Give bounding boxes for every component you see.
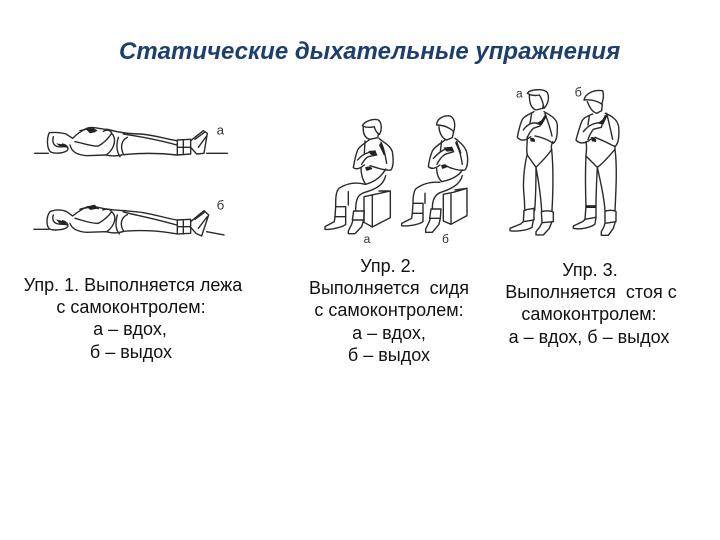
figure: exercise 2b sitting, exhale: б — [442, 232, 449, 246]
figure: exercise 1a lying, inhale — [35, 122, 227, 157]
figure: exercise 3a standing, inhale — [510, 86, 557, 235]
caption: exercise 1: с самоконтролем: — [56, 297, 206, 317]
caption: exercise 3: самоконтролем: — [521, 304, 657, 324]
figure: exercise 2a sitting, inhale: а — [364, 232, 371, 246]
caption: exercise 1: Упр. 1. Выполняется лежа — [24, 275, 242, 295]
caption: exercise 2 — [309, 256, 469, 365]
figure: exercise 3a standing, inhale: а — [516, 86, 523, 100]
caption: exercise 2: Выполняется сидя — [309, 278, 469, 298]
caption: exercise 1: а – вдох, — [93, 319, 167, 339]
caption: exercise 2: а – вдох, — [352, 323, 426, 343]
caption: exercise 3: а – вдох, б – выдох — [509, 327, 669, 347]
caption: exercise 3 — [505, 260, 677, 347]
caption: exercise 3: Выполняется стоя с — [505, 282, 677, 302]
figure: exercise 3b standing, exhale — [573, 86, 619, 235]
figure: exercise 1b lying, exhale: б — [217, 197, 225, 212]
title: Статические дыхательные упражнения — [119, 38, 620, 65]
figure: exercise 1b lying, exhale — [34, 197, 225, 236]
caption: exercise 3: Упр. 3. — [562, 260, 618, 280]
figure: exercise 1a lying, inhale: а — [217, 122, 225, 137]
caption: exercise 2: б – выдох — [348, 345, 430, 365]
figure: exercise 2a sitting, inhale — [325, 119, 393, 246]
caption: exercise 2: с самоконтролем: — [314, 300, 464, 320]
caption: exercise 1 — [24, 275, 242, 362]
figure: exercise 2b sitting, exhale — [402, 116, 468, 246]
caption: exercise 1: б – выдох — [90, 342, 172, 362]
figure: exercise 3b standing, exhale: б — [575, 86, 582, 100]
caption: exercise 2: Упр. 2. — [360, 256, 416, 276]
